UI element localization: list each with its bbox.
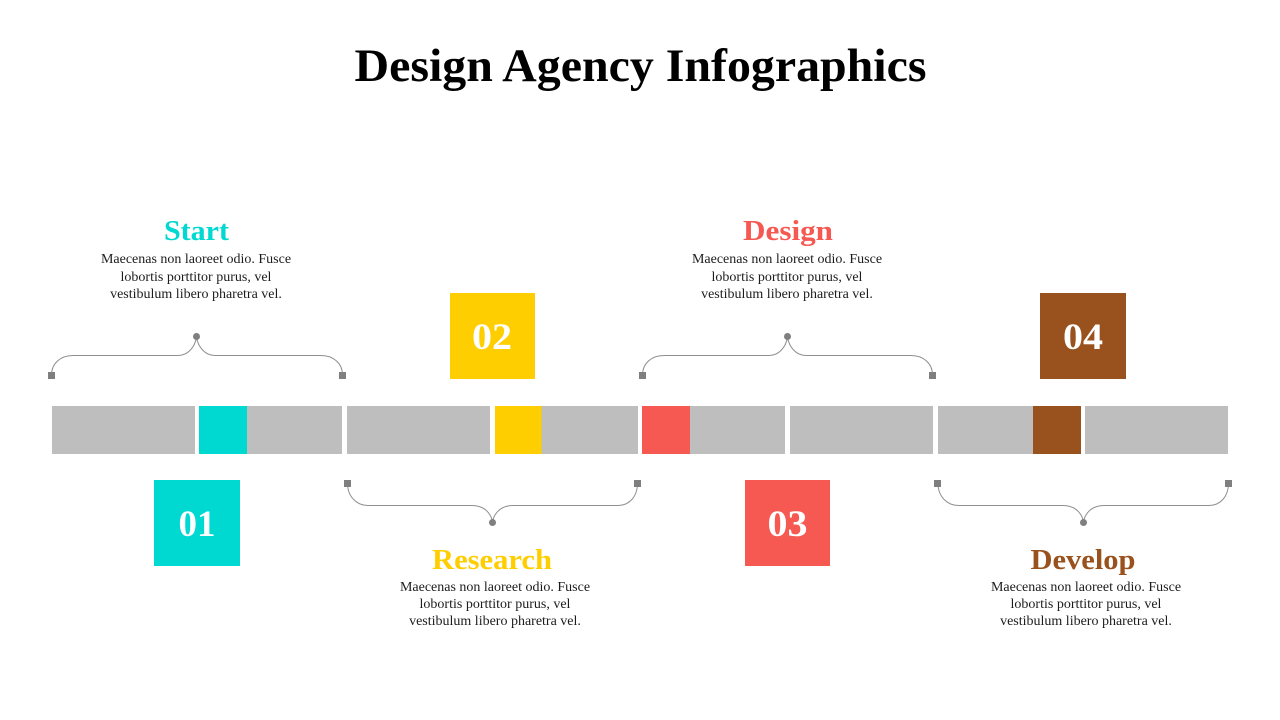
number box: 04: 04 bbox=[1063, 317, 1103, 358]
title: Design Agency Infographics bbox=[354, 40, 927, 92]
number box: 04 bbox=[1040, 293, 1126, 379]
text block: design: Maecenas non laoreet odio. Fusce bbox=[692, 252, 882, 267]
text block: research: Maecenas non laoreet odio. Fusce bbox=[400, 580, 590, 595]
panel: research bbox=[344, 293, 641, 629]
timeline bar bbox=[52, 406, 1228, 454]
text block: start: Maecenas non laoreet odio. Fusce bbox=[101, 252, 291, 267]
brace: start bbox=[48, 333, 346, 379]
heading: design: Design bbox=[743, 216, 833, 247]
panel: develop bbox=[934, 293, 1232, 629]
text block: research: lobortis porttitor purus, vel bbox=[420, 597, 571, 612]
heading: research: Research bbox=[432, 545, 552, 576]
text block: develop: Maecenas non laoreet odio. Fusce bbox=[991, 580, 1181, 595]
brace: research bbox=[344, 480, 641, 526]
number box: 03 bbox=[745, 480, 830, 566]
panel: design bbox=[639, 216, 936, 566]
text block: start: vestibulum libero pharetra vel. bbox=[110, 287, 282, 302]
text block: design: lobortis porttitor purus, vel bbox=[712, 270, 863, 285]
heading: start: Start bbox=[164, 216, 230, 247]
number box: 02 bbox=[450, 293, 535, 379]
heading: develop: Develop bbox=[1030, 545, 1136, 576]
number box: 01 bbox=[154, 480, 240, 566]
text block: research: vestibulum libero pharetra vel. bbox=[409, 614, 581, 629]
number box: 03: 03 bbox=[768, 504, 808, 545]
number box: 01: 01 bbox=[178, 504, 216, 545]
text block: develop: vestibulum libero pharetra vel. bbox=[1000, 614, 1172, 629]
brace: design bbox=[639, 333, 936, 379]
number box: 02: 02 bbox=[472, 317, 512, 358]
text block: develop: lobortis porttitor purus, vel bbox=[1011, 597, 1162, 612]
text block: start: lobortis porttitor purus, vel bbox=[121, 270, 272, 285]
panel: start bbox=[48, 216, 346, 566]
text block: design: vestibulum libero pharetra vel. bbox=[701, 287, 873, 302]
brace: develop bbox=[934, 480, 1232, 526]
